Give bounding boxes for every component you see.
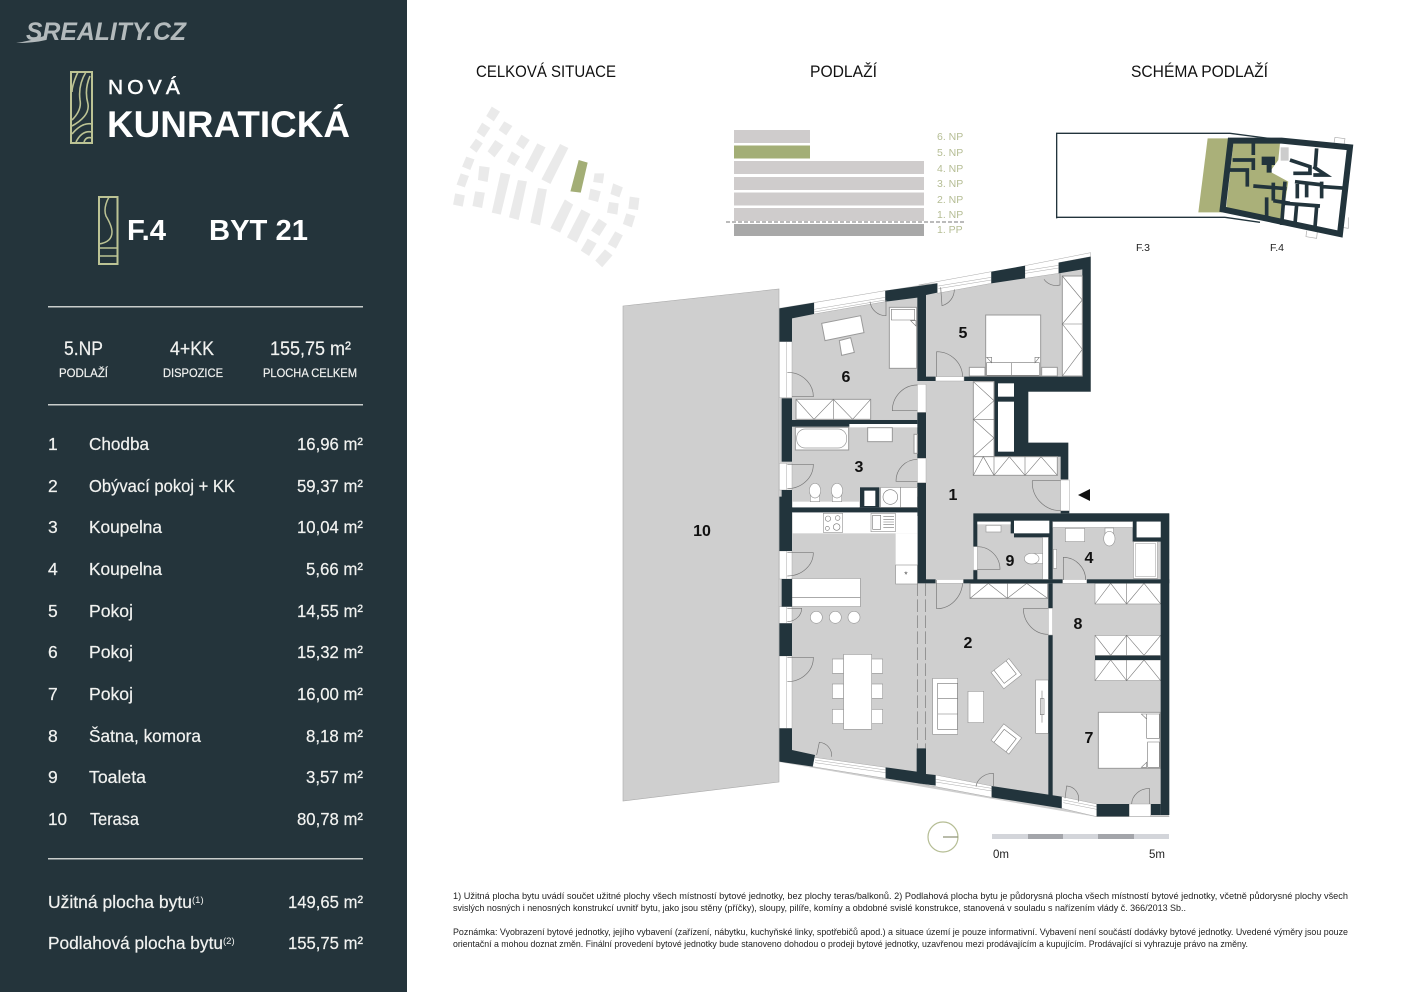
room table: 4	[48, 559, 58, 579]
usable area: Užitná plocha bytu	[48, 892, 192, 912]
room table: 16,00 m²	[297, 684, 363, 704]
dashed room divider	[917, 583, 925, 748]
room numbers: 4	[1085, 550, 1094, 567]
room numbers: 7	[1085, 730, 1094, 747]
usable area: 149,65 m²	[288, 892, 363, 912]
summary: layout: 4+KK	[170, 339, 214, 360]
room table: 7	[48, 684, 58, 704]
door sills	[917, 377, 1069, 511]
logo: Nová Kunratická: NOVÁ	[108, 76, 184, 99]
door sills	[936, 547, 1151, 817]
floor scheme	[1057, 133, 1350, 238]
floor stack chart: 6. NP	[937, 131, 963, 143]
room table: 59,37 m²	[297, 476, 363, 496]
scheme label F.4: F.4	[1270, 242, 1284, 254]
room numbers: 1	[949, 487, 958, 504]
room table: 10,04 m²	[297, 517, 363, 537]
room numbers: 10	[693, 523, 711, 540]
highlighted building	[570, 160, 588, 193]
footnotes	[453, 891, 1348, 950]
bed: room 7	[1098, 712, 1160, 768]
building label: F.4 Byt 21: F.4	[127, 215, 166, 247]
room table: Obývací pokoj + KK	[89, 476, 235, 496]
closets: rooms 5, 6, 1	[796, 276, 1082, 475]
entrance arrow	[1078, 489, 1090, 501]
white shafts	[998, 383, 1014, 397]
summary: total area	[263, 339, 357, 380]
room table: 9	[48, 767, 58, 787]
site plan	[453, 107, 639, 267]
building label: F.4 Byt 21: BYT 21	[209, 215, 308, 247]
floor stack chart: 1. NP	[937, 209, 963, 221]
room numbers: 6	[842, 369, 851, 386]
upper half furniture and walls	[779, 253, 1091, 520]
footnotes: Poznámka: Vyobrazení bytové jednotky, jejího vybavení (zařízení, nábytku, kuchyňské linky, spotřebičů apod.) a situace území je pouze informativní. Vybavení není součástí dodávky bytové jednotky. Uvedené výměry jsou pouze	[453, 927, 1348, 938]
doors	[787, 273, 1061, 511]
watermark logo: SREALITY.CZ	[26, 18, 188, 46]
kitchen: *	[904, 570, 908, 580]
heading: floors: PODLAŽÍ	[810, 62, 877, 81]
floor stack chart: 1. PP	[937, 224, 963, 236]
floor area: Podlahová plocha bytu	[48, 933, 223, 953]
doors	[787, 547, 1149, 804]
room table: 5,66 m²	[306, 559, 363, 579]
room table	[48, 434, 363, 829]
building label: F.4 Byt 21	[99, 197, 308, 264]
floor area: 155,75 m²	[288, 933, 363, 953]
footnotes: 1) Užitná plocha bytu uvádí součet užitné plochy všech místností bytové jednotky, bez plochy teras/balkonů. 2) Podlahová plocha bytu je půdorysná plocha všech místností bytové jednotky, včetně půdorysné plochy všech	[453, 891, 1348, 902]
floor stack chart: 4. NP	[937, 163, 963, 175]
room numbers: 2	[964, 635, 973, 652]
closets: rooms 2, 8	[970, 583, 1161, 681]
footnotes: orientační a mohou doznat změn. Finální provedení bytové jednotky bude stanoveno dohodou o prodeji bytové jednotky, uzavřenou mezi prodávajícím a kupujícím. Prodávající si vyhrazuje právo na změny.	[453, 939, 1248, 950]
room table: 8,18 m²	[306, 726, 363, 746]
furniture: room 5	[969, 315, 1057, 376]
room table: Koupelna	[89, 559, 162, 579]
floor stack chart: 3. NP	[937, 178, 963, 190]
furniture: bathroom 3	[793, 424, 917, 507]
summary: layout	[163, 339, 223, 380]
room table: 15,32 m²	[297, 642, 363, 662]
living room furniture	[933, 659, 1048, 754]
heading: floor scheme: SCHÉMA PODLAŽÍ	[1131, 62, 1268, 81]
dining table	[832, 654, 883, 729]
floor stack chart: 2. NP	[937, 194, 963, 206]
room table: Pokoj	[89, 601, 133, 621]
room table: 2	[48, 476, 58, 496]
logo: Nová Kunratická	[71, 72, 350, 145]
room numbers: 5	[959, 325, 968, 342]
room table: Pokoj	[89, 642, 133, 662]
kitchen	[792, 513, 917, 623]
floor stack chart: 5. NP	[937, 147, 963, 159]
apartment floor	[779, 257, 1169, 817]
lower half furniture and walls	[779, 497, 1169, 817]
footnotes: svislých nosných i nenosných konstrukcí uvnitř bytu, jako jsou stěny (příčky), sloupy, pilíře, komíny a obdobné svislé konstrukce, stanovená v souladu s nařízením vlády č. 366/2013 Sb..	[453, 903, 1186, 914]
scale bar: 5m	[1149, 849, 1165, 861]
usable area: (1)	[192, 895, 204, 906]
room numbers: 3	[855, 459, 864, 476]
room table: Pokoj	[89, 684, 133, 704]
heading: site plan: CELKOVÁ SITUACE	[476, 62, 616, 81]
room table: 8	[48, 726, 58, 746]
room table: Terasa	[90, 809, 139, 829]
terrace	[623, 289, 779, 801]
furniture: room 6	[822, 307, 917, 368]
room table: Chodba	[89, 434, 149, 454]
scale bar: 0m	[993, 849, 1009, 861]
summary: total area: PLOCHA CELKEM	[263, 366, 357, 380]
usable area	[48, 892, 363, 912]
room table: 3	[48, 517, 58, 537]
room numbers: 8	[1074, 616, 1083, 633]
summary: total area: 155,75 m²	[270, 339, 351, 360]
windows	[779, 253, 1091, 490]
walls	[779, 497, 1169, 817]
room table: 5	[48, 601, 58, 621]
floor area	[48, 933, 363, 953]
summary: floor: 5.NP	[64, 339, 103, 360]
scheme label F.3: F.3	[1136, 242, 1150, 254]
summary: layout: DISPOZICE	[163, 366, 223, 380]
scale bar	[992, 834, 1169, 861]
room numbers	[693, 325, 1094, 747]
room table: 1	[48, 434, 58, 454]
compass	[928, 822, 958, 852]
windows	[779, 551, 1097, 817]
room numbers: 9	[1006, 553, 1015, 570]
room table: 3,57 m²	[306, 767, 363, 787]
panel: left sidebar	[0, 0, 407, 992]
logo: Nová Kunratická: KUNRATICKÁ	[107, 104, 350, 145]
walls	[779, 257, 1091, 520]
room table: 14,55 m²	[297, 601, 363, 621]
floor area: (2)	[223, 936, 235, 947]
room table: Koupelna	[89, 517, 162, 537]
room table: Šatna, komora	[89, 725, 201, 746]
summary: floor: PODLAŽÍ	[59, 365, 109, 380]
summary: floor	[59, 339, 109, 380]
floor stack chart	[726, 130, 964, 236]
room table: 6	[48, 642, 58, 662]
room table: 16,96 m²	[297, 434, 363, 454]
bathrooms 9 and 4 fixtures	[977, 521, 1161, 579]
room table: 10	[48, 809, 67, 829]
room table: 80,78 m²	[297, 809, 363, 829]
floor plan	[623, 253, 1169, 817]
room table: Toaleta	[89, 767, 146, 787]
